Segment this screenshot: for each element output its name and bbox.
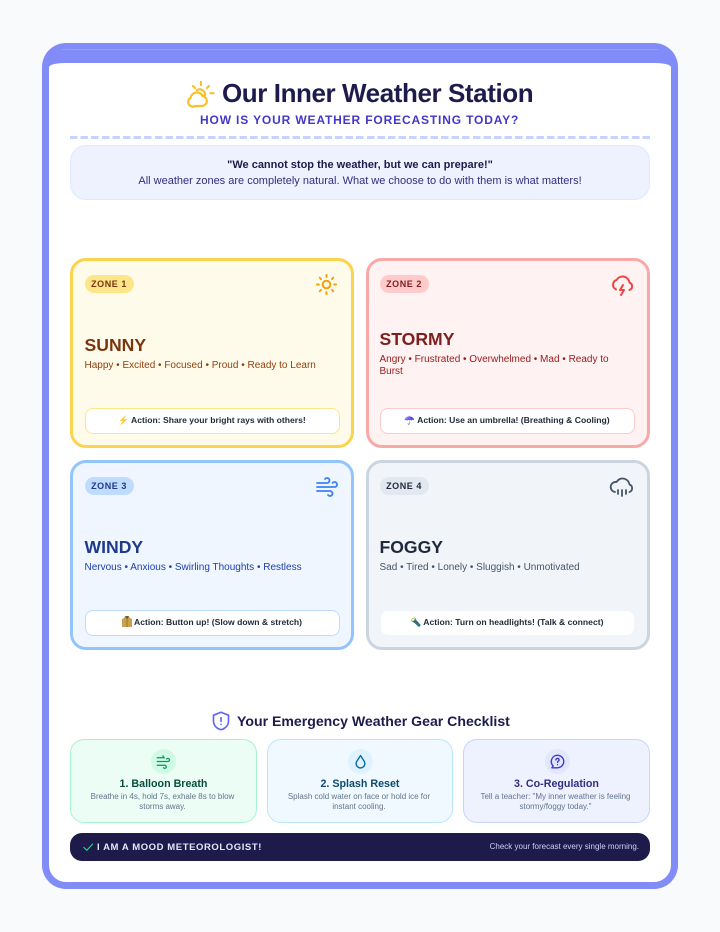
- icon: rain cloud: [610, 478, 633, 497]
- panel: zone 2 stormy: STORMY: [380, 328, 454, 348]
- panel: zone 3 windy: [70, 460, 354, 650]
- panel: co-regulation: [463, 739, 650, 823]
- icon: check: [83, 844, 94, 851]
- panel: zone 1 sunny: ZONE 1: [91, 278, 127, 288]
- panel: zone 4 foggy: FOGGY: [380, 536, 443, 556]
- panel: balloon breath: 1. Balloon Breath: [120, 778, 207, 790]
- panel: zone 4 foggy: ZONE 4: [386, 480, 422, 490]
- panel: balloon breath: [70, 739, 257, 823]
- panel: co-regulation: 3. Co-Regulation: [514, 778, 599, 790]
- panel: splash reset: [267, 739, 453, 823]
- panel: zone 1 sunny: Happy • Excited • Focused • Proud • Ready to Learn: [84, 360, 316, 370]
- panel: zone 3 windy: ZONE 3: [91, 480, 127, 490]
- panel: balloon breath: storms away.: [139, 802, 186, 811]
- panel: splash reset: Splash cold water on face or hold ice for: [288, 792, 430, 801]
- heading: checklist: Your Emergency Weather Gear Checklist: [237, 713, 510, 729]
- panel: zone 4 foggy: Sad • Tired • Lonely • Sluggish • Unmotivated: [380, 562, 580, 572]
- panel: splash reset: instant cooling.: [332, 802, 386, 811]
- title: Our Inner Weather Station: [222, 78, 533, 108]
- icon: thunderstorm cloud: [612, 276, 634, 296]
- panel: co-regulation: stormy/foggy today.": [519, 802, 592, 811]
- panel: zone 4 foggy: 🔦 Action: Turn on headlights! (Talk & connect): [411, 616, 603, 626]
- panel: zone 1 sunny: SUNNY: [84, 334, 146, 354]
- callout: quote: "We cannot stop the weather, but we can prepare!": [227, 158, 493, 170]
- panel: zone 1 sunny: ⚡ Action: Share your bright rays with others!: [118, 414, 306, 424]
- icon: shield: [212, 711, 230, 731]
- panel: co-regulation: Tell a teacher: "My inner weather is feeling: [480, 792, 631, 801]
- panel: splash reset: 2. Splash Reset: [320, 778, 400, 790]
- panel: zone 2 stormy: Burst: [380, 366, 403, 376]
- subtitle: HOW IS YOUR WEATHER FORECASTING TODAY?: [200, 113, 519, 127]
- callout: quote: All weather zones are completely natural. What we choose to do with them is what matters!: [138, 174, 582, 186]
- panel: zone 1 sunny: [70, 258, 354, 448]
- icon: sun: [316, 274, 337, 295]
- panel: zone 2 stormy: ZONE 2: [386, 278, 422, 288]
- panel: zone 3 windy: Action: Button up! (Slow down & stretch): [134, 616, 302, 626]
- footer banner: [70, 833, 650, 861]
- panel: zone 3 windy: Nervous • Anxious • Swirling Thoughts • Restless: [84, 562, 302, 572]
- panel: zone 3 windy: WINDY: [84, 536, 143, 556]
- footer banner: Check your forecast every single morning.: [490, 842, 639, 851]
- callout: quote: [70, 145, 650, 200]
- icon: wind: [316, 477, 338, 497]
- panel: zone 2 stormy: Angry • Frustrated • Overwhelmed • Mad • Ready to: [380, 354, 609, 364]
- panel: balloon breath: Breathe in 4s, hold 7s, exhale 8s to blow: [91, 792, 234, 801]
- footer banner: I AM A MOOD METEOROLOGIST!: [97, 842, 262, 852]
- panel: zone 2 stormy: ☂️ Action: Use an umbrella! (Breathing & Cooling): [404, 414, 610, 424]
- icon: sun behind cloud: [187, 80, 215, 108]
- panel: zone 2 stormy: [366, 258, 650, 448]
- panel: zone 4 foggy: [366, 460, 650, 650]
